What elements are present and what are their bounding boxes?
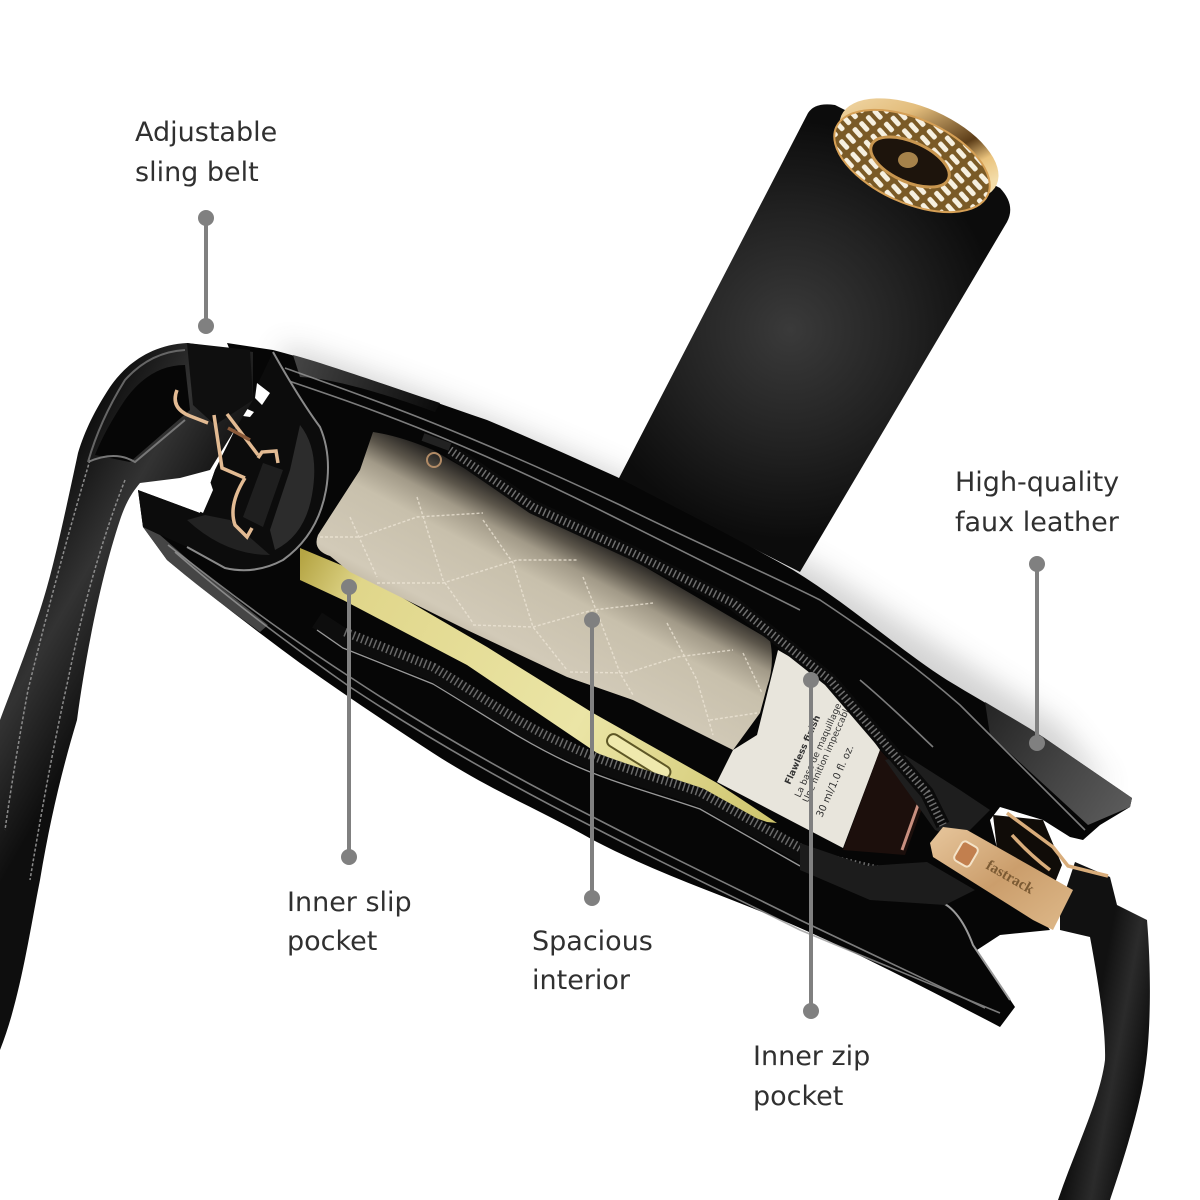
callout: High-quality faux leather: faux leather: [955, 507, 1120, 538]
main zipper: [423, 437, 990, 840]
phone in slip pocket: [300, 548, 777, 823]
callout: Inner zip pocket: Inner zip: [753, 1041, 870, 1072]
callout: Inner zip pocket: [753, 672, 870, 1112]
icon: zipper pull: [930, 827, 1073, 930]
paper label on bottle: La base de maquillage: [794, 702, 844, 799]
icon: black strap tab: [243, 463, 283, 527]
right strap: [1058, 862, 1150, 1200]
paper label on bottle: 30 ml/1.0 fl. oz.: [815, 743, 856, 819]
callout: Spacious interior: Spacious: [532, 926, 653, 957]
left strap: [0, 343, 253, 1050]
zipper tape lower right: [800, 843, 975, 905]
upper wall, right end: [985, 702, 1132, 825]
callout: Inner zip pocket: pocket: [753, 1081, 843, 1112]
shadow behind bag: [280, 345, 1110, 790]
paper label on bottle: Flawless finish: [784, 714, 823, 786]
callout: Adjustable sling belt: sling belt: [135, 157, 259, 188]
left end gusset: [138, 352, 328, 570]
callout: Adjustable sling belt: Adjustable: [135, 117, 277, 148]
callout: Inner slip pocket: [287, 579, 412, 957]
lower wall, left end: [143, 527, 268, 632]
beige quilted pouch: [316, 432, 772, 750]
callout: Adjustable sling belt: [135, 117, 277, 334]
callout: High-quality faux leather: [955, 467, 1120, 751]
right end: dark gusset behind hardware: [993, 815, 1062, 895]
icon: gold hardware right: [1007, 813, 1108, 876]
inner slip pocket zipper: [317, 620, 900, 880]
callout: Inner slip pocket: Inner slip: [287, 887, 412, 918]
callout: Spacious interior: [532, 612, 653, 996]
callout: Spacious interior: interior: [532, 965, 631, 996]
icon: gold clasp: [819, 77, 1014, 233]
right end: lower gusset edge: [935, 900, 1010, 1000]
paper label on bottle: [717, 650, 880, 848]
callout: High-quality faux leather: High-quality: [955, 467, 1119, 498]
paper label on bottle: Une finition impeccable: [802, 703, 854, 804]
white gaps around the ring: [143, 383, 270, 513]
flap with gold clasp: [618, 77, 1014, 572]
upper wall, left end: [293, 355, 440, 412]
icon: zipper pull: fastrack: [983, 858, 1037, 898]
bag body: [138, 343, 1132, 1027]
callout: Inner slip pocket: pocket: [287, 926, 377, 957]
phone button: [605, 732, 673, 781]
icon: gold ring and clip hardware: [175, 390, 278, 537]
dark bottle base: [843, 750, 925, 855]
